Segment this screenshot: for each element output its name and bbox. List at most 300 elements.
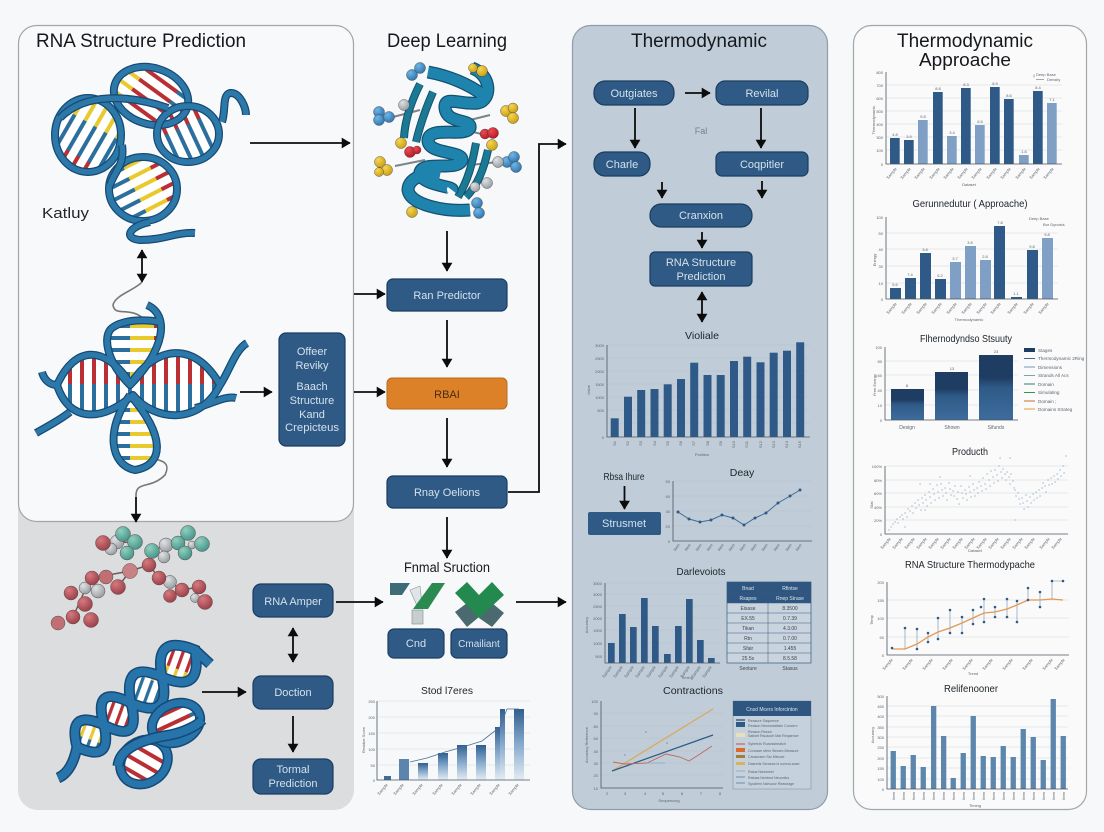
chart: bars 2: 0	[881, 297, 884, 302]
legend: stability: Thermodynamic 2Ring	[1038, 356, 1085, 361]
box: Offeer Review: Crepicteus	[285, 422, 340, 434]
arrow: RNA Ampler to Doction	[292, 628, 294, 662]
table: results: 0.7.39	[783, 616, 797, 622]
box: Doction: Doction	[274, 687, 312, 699]
chart: Violiale bars: S14	[784, 440, 789, 448]
chart: line with error bars: 150	[877, 598, 885, 603]
chart: Darlevoiots bars: 2500	[593, 604, 603, 609]
chart: line with error bars: Sample	[921, 657, 934, 671]
chart: Darlevoiots bars: Sample	[634, 664, 646, 679]
chart: Contractions lines: 2	[606, 791, 609, 796]
chart: bars 1: 8.3	[963, 82, 970, 87]
chart: bars 6: Timing	[969, 803, 981, 808]
chart: bars 1: 700	[876, 83, 884, 88]
chart: bars 1: Sample	[899, 166, 912, 180]
arrow: icons to Thermodynamic panel	[516, 601, 566, 603]
arrow: protein to Ran Predictor	[446, 231, 448, 271]
chart: scatter: Sample	[1011, 536, 1024, 550]
chart: line with error bars: Temp	[869, 614, 874, 625]
box: Strusmet	[588, 512, 661, 535]
chart: bars 6: Item	[941, 791, 946, 800]
chart: bars 2: 7.8	[997, 220, 1004, 225]
chart: Darlevoiots bars: Sample	[645, 664, 657, 679]
chart: bars 2: Sample	[945, 301, 958, 315]
table: results: Rfintse	[782, 586, 798, 592]
chart: Darlevoiots bars: Sample	[679, 664, 691, 679]
box: Offeer Review: Kand	[299, 409, 325, 421]
chart: stability bars: Sifunds	[988, 425, 1005, 431]
chart: bars 2: 7.4	[907, 272, 914, 277]
chart: scatter: 80%	[874, 478, 882, 483]
chart: line with error bars: 0	[882, 653, 885, 658]
chart: bars 6: Item	[911, 791, 916, 800]
chart: Contractions lines: 7	[700, 791, 703, 796]
panel: RNA Structure Prediction	[18, 26, 354, 522]
legend: Contractions: Dasreds Ssnaurs is ouncsl-ause	[748, 762, 800, 766]
chart: bars 6: 0	[882, 787, 885, 792]
chart: line with error bars: Sample	[1001, 657, 1014, 671]
chart: bars 2: 2.8	[982, 254, 989, 259]
chart: Deay line chart: Item	[738, 542, 747, 552]
box: RNA Ampler: RNA Amper	[264, 596, 322, 608]
chart: line with error bars: Sample	[1053, 657, 1066, 671]
chart title: Deay	[730, 467, 755, 479]
arrow: Cranxion to RNA Structure	[701, 232, 703, 248]
arrow: Doction to Tormal Prediction	[292, 716, 294, 752]
box: Coqpitler	[716, 152, 808, 176]
chart: bars 2: 3.8	[922, 247, 929, 252]
chart: bars 6: 350	[877, 725, 885, 730]
chart: scatter	[869, 456, 1068, 553]
chart: Contractions lines: Sequencing	[658, 798, 680, 803]
chart: Darlevoiots bars: 2000	[593, 616, 603, 621]
heading: Final Structure: Fnmal Sruction	[404, 560, 490, 575]
chart: Contractions lines	[584, 699, 723, 803]
chart: Stod Teres gradient bars: 50	[371, 763, 376, 768]
legend: Contractions: Sysdeen Nahuoor Reaseage	[748, 782, 794, 786]
heading: Gerunnedutur (Approache): Gerunnedutur ( Approache)	[912, 198, 1028, 210]
chart: Violiale bars: S13	[771, 440, 776, 448]
chart: Darlevoiots bars: Sample	[612, 664, 624, 679]
chart: bars 2: Bor Dynosis	[1043, 222, 1065, 227]
chart: Violiale bars: 1000	[595, 395, 605, 400]
table: results: 25.5s	[742, 656, 755, 662]
chart: Violiale bars: Position	[695, 452, 709, 457]
chart: stability bars: 23	[994, 349, 999, 354]
chart: Deay line chart: 0	[668, 539, 671, 544]
chart: bars 2: 30	[879, 264, 884, 269]
box: Offeer Review: Offeer	[297, 346, 328, 358]
chart: bars 1: Sample	[1028, 166, 1041, 180]
chart: scatter: 0	[880, 532, 883, 537]
chart: Stod Teres gradient bars: Sample	[469, 782, 482, 796]
box: Cnd: Cnd	[406, 638, 426, 650]
chart: bars 1: Sample	[985, 166, 998, 180]
chart: stability bars	[872, 345, 1018, 431]
arrow: top helix to Deep Learning	[250, 142, 350, 144]
box: Doction	[253, 676, 333, 709]
chart: bars 1: Sample	[1014, 166, 1027, 180]
table: results: 8.3500	[782, 606, 798, 612]
chart: Contractions lines: 6	[681, 791, 684, 796]
table: results: Eisase	[740, 606, 756, 612]
chart: bars 1: 8.8	[935, 86, 942, 91]
chart: scatter: Sample	[903, 536, 916, 550]
legend: Contractions: Ratusa Nenbed Neurotics	[748, 776, 789, 780]
chart: bars 1: Thermodynamic	[871, 106, 876, 134]
box: Outgiates	[594, 81, 674, 105]
chart: scatter: Sample	[1050, 536, 1063, 550]
chart: Violiale bars: S15	[797, 440, 802, 448]
chart: bars 2: Sample	[930, 301, 943, 315]
chart: Stod Teres gradient bars	[361, 685, 530, 796]
chart: bars 6: Item	[891, 791, 896, 800]
legend: Contractions: Sytertnis Ruaossheatch	[748, 742, 786, 746]
arrow: panel to Ran Predictor	[354, 293, 385, 295]
title: Thermodynamic: Thermodynamic	[631, 31, 767, 52]
chart: line with error bars: 200	[877, 580, 885, 585]
chart: bars 2: Sample	[1037, 301, 1050, 315]
chart: bars 1: 8.6	[1006, 93, 1013, 98]
heading: Product: Producth	[952, 446, 988, 458]
chart: Violiale bars: 2500	[595, 356, 605, 361]
chart: Violiale bars: S11	[744, 440, 749, 448]
chart: bars 2	[872, 215, 1065, 322]
chart: bars 1: 800	[876, 70, 884, 75]
chart: Stod Teres gradient bars: Sample	[411, 782, 424, 796]
icon: green chevron with grey diamonds	[455, 582, 504, 627]
chart: bars 1: Sample	[942, 166, 955, 180]
chart: bars 6: Item	[1041, 791, 1046, 800]
chart: Stod Teres gradient bars: 250	[368, 699, 376, 704]
chart: Violiale bars: 1500	[595, 382, 605, 387]
chart: line with error bars: Sample	[981, 657, 994, 671]
chart: bars 6: Item	[981, 791, 986, 800]
chart: Violiale bars: S2	[625, 440, 630, 446]
chart: Contractions lines: 90	[594, 711, 599, 716]
chart: line with error bars: Sample	[881, 657, 894, 671]
chart: bars 2: Thermodynamic	[955, 317, 983, 322]
chart: scatter: Sample	[1023, 536, 1036, 550]
chart: bars 1	[871, 70, 1062, 187]
chart: bars 6: Item	[1061, 791, 1066, 800]
chart: line with error bars: Sample	[961, 657, 974, 671]
box: Cnd	[388, 629, 444, 658]
table: results: Bnad	[742, 586, 754, 592]
chart: Contractions lines: 30	[594, 761, 599, 766]
chart: Deay line chart: Item	[705, 542, 714, 552]
chart: scatter: Stat	[869, 501, 874, 509]
chart: stability bars: Free Energy	[872, 374, 877, 396]
chart: Violiale bars: 3000	[595, 343, 605, 348]
chart: scatter: Sample	[951, 536, 964, 550]
chart: Violiale bars: S9	[718, 440, 723, 446]
chart: scatter: 100%	[872, 464, 882, 469]
chart: bars 2: Sample	[915, 301, 928, 315]
chart: line with error bars: 100	[877, 616, 885, 621]
chart: bars 1: 6.5	[977, 119, 984, 124]
chart: bars 6: Item	[921, 791, 926, 800]
box: Ran Predictor	[387, 279, 507, 311]
box: RBAI: RBAI	[434, 389, 460, 401]
chart: scatter: Sample	[999, 536, 1012, 550]
icon: folded green and grey block	[390, 583, 445, 624]
chart: bars 6: Item	[1001, 791, 1006, 800]
chart: Contractions lines: 4	[644, 791, 647, 796]
arrow: helix to Offeer box	[240, 391, 272, 393]
arrow: RBAI to Rnay Oelions	[446, 418, 448, 467]
chart: scatter: 40%	[874, 505, 882, 510]
chart: Violiale bars: S5	[665, 440, 670, 446]
box: Rnay Oelions: Rnay Oelions	[414, 487, 481, 499]
legend: Contractions: Concase sfem Stream Measure	[748, 749, 799, 753]
box: RNA Structure Prediction: Prediction	[677, 271, 725, 283]
legend: stability: Strands All Acs	[1038, 373, 1069, 378]
chart: Stod Teres gradient bars: Sample	[450, 782, 463, 796]
legend: Contractions: Canarcsen Ssr Mteuce	[748, 755, 785, 759]
chart: stability bars: 40	[878, 388, 883, 393]
legend: stability: Domain	[1038, 382, 1054, 387]
chart: stability bars: 80	[878, 359, 883, 364]
chart: bars 1: Sample	[1042, 166, 1055, 180]
chart: scatter: Sample	[963, 536, 976, 550]
table: results: Sfair	[743, 646, 753, 652]
chart: stability bars: 13	[950, 366, 955, 371]
chart: Darlevoiots bars: 1000	[593, 641, 603, 646]
chart title: Violiale	[685, 330, 719, 342]
chart: Stod Teres gradient bars: Sample	[431, 782, 444, 796]
chart: Deay line chart: Item	[760, 542, 769, 552]
box: Cranxion	[650, 204, 752, 227]
heading: Thermodynamic Stability: Flhernodyndso Stsuuty	[920, 333, 1013, 345]
box: RBAI	[387, 378, 507, 409]
chart: stability bars: Design	[899, 425, 915, 431]
legend: Contractions: Satiset Rsuaoch Mat Reqaence	[748, 734, 799, 738]
chart: bars 1: Dataset	[962, 182, 977, 187]
chart: Darlevoiots bars: 3000	[593, 592, 603, 597]
box: Tormal Prediction	[253, 759, 333, 794]
chart: bars 6: Item	[1031, 791, 1036, 800]
chart: Violiale bars: S1	[612, 440, 617, 446]
box: Cmailiant	[451, 629, 507, 658]
chart: line with error bars: 50	[880, 635, 885, 640]
box: RNA Structure Prediction: RNA Structure	[666, 257, 736, 269]
illustration: cross-shaped RNA helix	[36, 282, 247, 497]
chart: Contractions lines: 8	[719, 791, 722, 796]
box: Cmailiant: Cmailiant	[458, 639, 500, 650]
chart: bars 1: Sample	[928, 166, 941, 180]
chart: scatter: Sample	[927, 536, 940, 550]
box: Revilal: Revilal	[745, 88, 779, 100]
chart: scatter: Dataset	[968, 548, 983, 553]
chart: scatter: Sample	[975, 536, 988, 550]
chart: bars 6: Item	[951, 791, 956, 800]
chart: Darlevoiots bars	[584, 581, 720, 680]
chart: bars 6: 450	[877, 704, 885, 709]
arrow: Outgiates to Revilal	[685, 92, 710, 94]
chart: bars 1: 5.8	[920, 114, 927, 119]
chart: stability bars: Shown	[944, 425, 960, 431]
chart: Darlevoiots bars: Sample	[668, 664, 680, 679]
legend: Contractions: Reason Neurostatistic Concerv	[748, 724, 798, 728]
chart: Contractions lines: 60	[594, 736, 599, 741]
chart: bars 1: Sample	[970, 166, 983, 180]
chart: Stod Teres gradient bars: 150	[368, 731, 376, 736]
chart: bars 2: Sample	[885, 301, 898, 315]
chart: Deay line chart: Item	[794, 542, 803, 552]
title: Thermodynamic Approache: Approache	[919, 50, 1011, 70]
arrow: Coqpitler to Cranxion	[761, 181, 763, 198]
chart: bars 6: 300	[877, 735, 885, 740]
box: Revilal	[716, 81, 808, 105]
legend: Contractions: Ratus Nieamest	[748, 770, 774, 774]
chart: Deay line chart: 40	[666, 494, 671, 499]
chart: Darlevoiots bars: Sample	[701, 664, 713, 679]
chart: bars 6: Item	[1051, 791, 1056, 800]
box: Coqpitler: Coqpitler	[740, 159, 784, 171]
chart: Stod Teres gradient bars: 100	[368, 747, 376, 752]
legend: stability: Dimensions	[1038, 365, 1063, 370]
chart: Deay line chart: Item	[716, 542, 725, 552]
chart: Violiale bars: S3	[638, 440, 643, 446]
chart: scatter: Sample	[939, 536, 952, 550]
chart: Violiale bars: S7	[691, 440, 696, 446]
chart: Violiale bars: S4	[652, 440, 657, 446]
chart: Contractions lines: Accuracy Reference	[584, 726, 589, 763]
chart title: Stod l7eres	[421, 685, 473, 697]
chart: Violiale bars: S6	[678, 440, 683, 446]
chart: bars 1: Deep Base	[1036, 72, 1057, 77]
chart: Deay line chart: Item	[727, 542, 736, 552]
chart: bars 1: 4.8	[892, 132, 899, 137]
arrow: down to molecule	[135, 497, 137, 522]
chart: bars 2: Sample	[1022, 301, 1035, 315]
heading: Reliferoover: Relifenooner	[944, 683, 998, 695]
chart: Violiale bars: 0	[602, 435, 605, 440]
box: Charle	[594, 152, 650, 176]
chart: bars 2: Sample	[975, 301, 988, 315]
chart: Darlevoiots bars: Sample	[623, 664, 635, 679]
chart: Contractions lines: 5	[662, 791, 665, 796]
chart: line with error bars: Trend	[968, 671, 978, 676]
chart: bars 6: Accuracy	[870, 727, 875, 743]
label: Katluy: Katluy	[42, 205, 90, 222]
chart: bars 1: 500	[876, 109, 884, 114]
molecule: ball and stick cluster	[51, 526, 212, 630]
title: Deep Learning: Deep Learning	[387, 31, 507, 52]
chart: stability bars: 8	[906, 383, 909, 388]
box: Offeer Review	[279, 333, 345, 446]
chart: bars 1: 8.4	[1035, 85, 1042, 90]
chart: bars 2: Sample	[1006, 301, 1019, 315]
arrow: helix link	[141, 250, 143, 282]
heading: Darlevoiots: Darlevoiots	[676, 566, 726, 578]
title: Thermodynamic Approache	[897, 31, 1033, 70]
panel: Thermodynamic Approach	[854, 26, 1086, 810]
legend: Contractions	[733, 701, 811, 789]
table: results: 0.7.00	[783, 636, 797, 642]
chart: Deay line chart: Item	[694, 542, 703, 552]
chart: Deay line chart: Item	[772, 542, 781, 552]
box: Offeer Review: Baach	[296, 381, 328, 393]
chart: stability bars: 0	[880, 418, 883, 423]
box: Offeer Review: Reviky	[295, 360, 329, 372]
legend: stability: Stages	[1038, 348, 1053, 353]
illustration: blue RNA double loop	[111, 695, 207, 794]
table: results: Rnep Strase	[776, 596, 804, 602]
chart: bars 6	[870, 694, 1068, 808]
panel: bottom left grey section	[18, 505, 354, 810]
chart: bars 6: 250	[877, 745, 885, 750]
chart: Stod Teres gradient bars: Sample	[392, 782, 405, 796]
panel: Thermodynamic	[572, 26, 828, 810]
legend: stability: Simulating	[1038, 390, 1060, 395]
heading: Contractions: Contractions	[663, 685, 723, 697]
arrow: panel to RBAI	[354, 391, 385, 393]
chart: bars 1: 0	[881, 162, 884, 167]
box: Outgiates: Outgiates	[610, 88, 658, 100]
chart: Contractions lines: 10	[594, 786, 599, 791]
chart: line with error bars	[869, 580, 1069, 676]
chart: bars 1: 1.6	[1021, 149, 1028, 154]
chart: bars 6: Item	[901, 791, 906, 800]
chart: bars 2: 3.7	[952, 256, 959, 261]
chart: bars 2: 9.8	[1044, 232, 1051, 237]
label: Fal: Fal	[695, 126, 707, 136]
chart: bars 1: 7.1	[1049, 97, 1056, 102]
chart: bars 2: 40	[879, 247, 884, 252]
chart: Stod Teres gradient bars: 200	[368, 715, 376, 720]
chart: bars 1: Sample	[885, 166, 898, 180]
chart: Darlevoiots bars: 3500	[593, 581, 603, 586]
chart: line with error bars: Sample	[901, 657, 914, 671]
chart: scatter: Sample	[987, 536, 1000, 550]
legend: Contractions: Reasure Saquence	[748, 719, 779, 723]
box: Tormal Prediction: Prediction	[269, 778, 317, 790]
chart: bars 2: Sample	[960, 301, 973, 315]
chart: bars 1: 600	[876, 96, 884, 101]
label: Rbsa Ihure: Rbsa Ihure	[604, 471, 645, 483]
chart: bars 1: 300	[876, 135, 884, 140]
chart: bars 6: Item	[1011, 791, 1016, 800]
box: Tormal Prediction: Tormal	[276, 764, 310, 776]
chart: bars 1: 400	[876, 122, 884, 127]
arrow: Rnay Oelions to Thermodynamic panel	[508, 144, 566, 492]
box: RNA Ampler	[253, 584, 333, 617]
arrow: Rnay Oelions to Final Structure	[446, 517, 448, 558]
legend: Contractions: Reason Rsean	[748, 730, 772, 734]
chart: bars 2: 1.1	[1013, 291, 1020, 296]
chart: bars 2: 5.2	[937, 273, 944, 278]
legend: stability: Domain ;	[1038, 399, 1056, 404]
chart: bars 2: Deep Base	[1029, 216, 1050, 221]
table: results: 8.5.58	[783, 656, 797, 662]
chart: bars 1: Sample	[956, 166, 969, 180]
title: Thermodynamic Approache: Thermodynamic	[897, 31, 1033, 52]
table: results: Tikan	[742, 626, 754, 632]
chart: bars 2: 3.5	[967, 240, 974, 245]
illustration: four-lobed RNA helix	[55, 58, 246, 240]
chart: Stod Teres gradient bars: Sample	[507, 782, 520, 796]
chart: bars 1: Sample	[999, 166, 1012, 180]
chart: Violiale bars: S8	[705, 440, 710, 446]
chart: Contractions lines: 20	[594, 773, 599, 778]
chart: Deay line chart: 50	[666, 479, 671, 484]
chart: Contractions lines: 40	[594, 749, 599, 754]
chart: bars 6: Item	[1021, 791, 1026, 800]
chart: Darlevoiots bars: 500	[595, 654, 603, 659]
chart: Violiale bars: 500	[597, 408, 605, 413]
